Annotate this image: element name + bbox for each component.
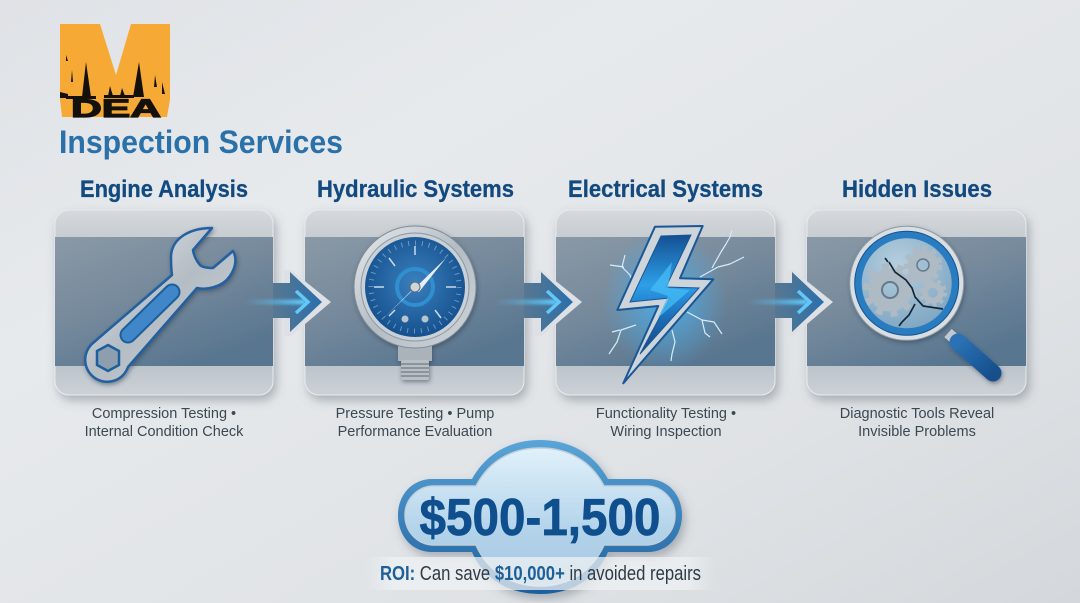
text: hydraulic systems details: Pressure Testing • Pump <box>336 406 494 422</box>
panel: hydraulic systems card <box>305 210 524 395</box>
text: hidden issues details: Invisible Problems <box>858 424 976 440</box>
ROI band <box>365 557 715 590</box>
heading: Engine Analysis: Engine Analysis <box>80 176 248 203</box>
logo: M DEA <box>60 24 170 123</box>
text: engine analysis details: Compression Testing • <box>92 406 236 422</box>
text: electrical systems details: Wiring Inspection <box>610 424 722 440</box>
panel: hidden issues card <box>807 210 1026 395</box>
icon: magnifying glass with gears <box>850 226 993 373</box>
icon: wrench <box>85 228 235 382</box>
panel: electrical systems card <box>556 210 775 395</box>
heading: Hydraulic Systems: Hydraulic Systems <box>317 176 514 203</box>
price: $500-1,500 <box>420 489 660 547</box>
icon: lightning bolt <box>603 226 744 383</box>
price badge <box>398 440 682 594</box>
arrow: engine to hydraulic <box>245 270 331 336</box>
text: electrical systems details: Functionality Testing • <box>596 406 736 422</box>
text: hydraulic systems details: Performance Evaluation <box>338 424 492 440</box>
icon: pressure gauge <box>354 226 476 380</box>
panel: engine analysis card <box>55 210 273 395</box>
arrow: hydraulic to electrical <box>496 270 582 336</box>
logo: M DEA: DEA <box>71 95 161 123</box>
title: Inspection Services <box>59 124 343 160</box>
heading: Hidden Issues: Hidden Issues <box>842 176 992 203</box>
ROI text: ROI: Can save $10,000+ in avoided repairs <box>380 563 701 585</box>
heading: Electrical Systems: Electrical Systems <box>568 176 763 203</box>
text: hidden issues details: Diagnostic Tools Reveal <box>840 406 994 422</box>
gears <box>866 248 945 314</box>
arrow: electrical to hidden issues <box>747 270 833 336</box>
text: engine analysis details: Internal Condition Check <box>85 424 244 440</box>
